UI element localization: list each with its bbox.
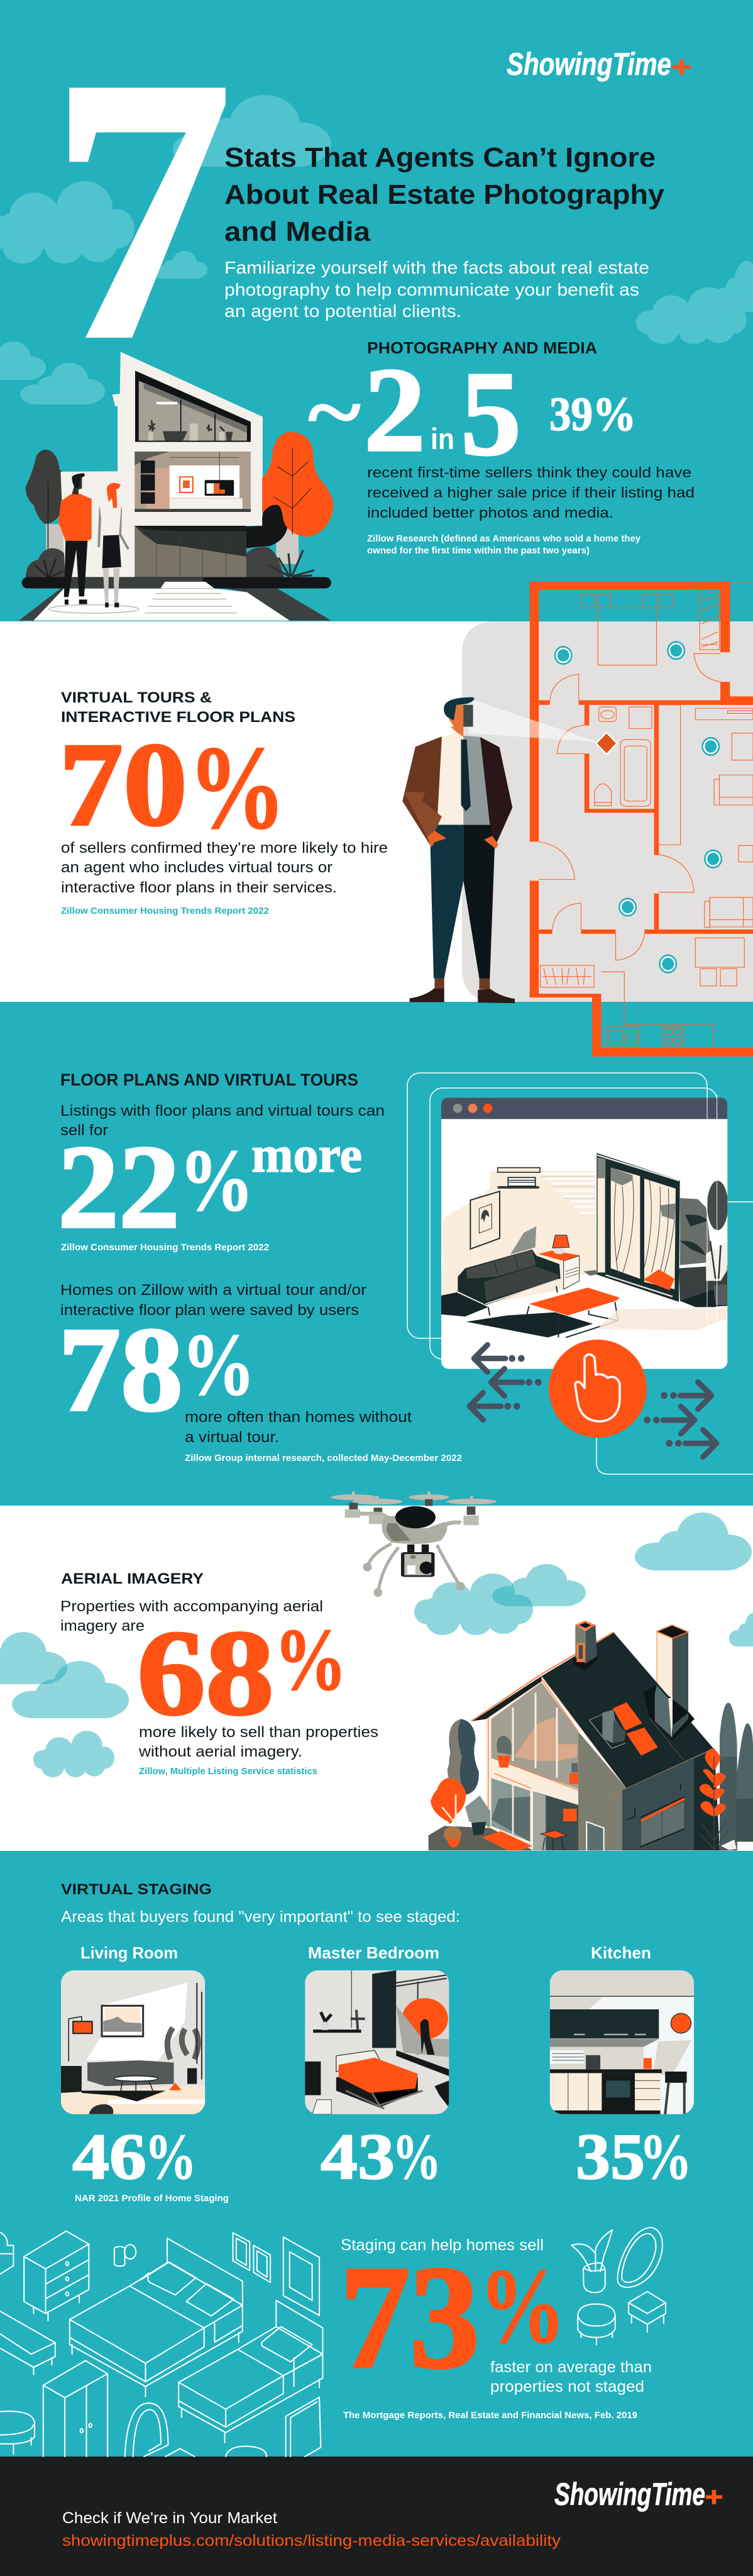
body text: more often than homes without — [185, 1409, 412, 1426]
body text: properties not staged — [490, 2378, 644, 2396]
title — [224, 142, 665, 247]
small vase — [114, 2245, 136, 2266]
heading: VIRTUAL STAGING — [61, 1881, 212, 1898]
orange leaf plant — [700, 1748, 737, 1850]
person: man — [58, 473, 92, 604]
title bar — [441, 1094, 727, 1119]
body text: included better photos and media. — [367, 504, 613, 521]
tree: dark — [26, 450, 74, 577]
stat: 35%: % — [639, 2121, 692, 2193]
panel: virtual staging — [61, 1881, 694, 2204]
camera — [401, 1545, 434, 1577]
heading: VIRTUAL TOURS & — [61, 689, 212, 706]
stat: about 2 in 5: in — [431, 422, 454, 455]
illustration: modern house with couple — [19, 352, 333, 621]
section background: virtual staging — [0, 1851, 753, 2457]
source: Zillow Research (defined as Americans who sold a home they — [367, 534, 640, 544]
stat: 22% more: 22 — [58, 1121, 180, 1253]
framed pictures — [233, 2233, 319, 2316]
stat: 73% — [340, 2235, 566, 2399]
call to action: Check if We're in Your Market — [62, 2509, 277, 2527]
panel: aerial imagery stat — [60, 1570, 378, 1777]
walls — [530, 582, 753, 1057]
stat: 43%: % — [392, 2121, 441, 2193]
stat: about 2 in 5: 5 — [461, 347, 521, 480]
stat: 22% more: % — [179, 1131, 254, 1230]
panel: footer — [62, 2477, 723, 2550]
panel: virtual tours stat — [59, 689, 388, 916]
text: listings: Listings with floor plans and virtual tours can — [60, 1102, 385, 1119]
section background: virtual tours — [0, 621, 753, 1002]
front wall with window — [622, 1748, 720, 1850]
label: kitchen: Kitchen — [591, 1943, 651, 1962]
stat: 68% — [137, 1605, 347, 1740]
title: Stats That Agents Can’t Ignore — [224, 142, 656, 173]
body text: faster on average than — [490, 2358, 652, 2376]
source — [367, 534, 640, 556]
stat: 70% — [59, 719, 286, 854]
stat: 68%: % — [274, 1611, 347, 1709]
footstool round — [578, 2304, 615, 2345]
heading: PHOTOGRAPHY AND MEDIA — [367, 338, 597, 357]
panel: staging speed stat — [340, 2235, 652, 2421]
subtitle — [224, 258, 649, 321]
arrows: swipe right — [644, 1382, 717, 1457]
body text: interactive floor plans in their services. — [61, 879, 337, 896]
plant — [571, 2230, 612, 2292]
person: woman — [99, 483, 128, 608]
body text: recent first-time sellers think they could have — [367, 464, 691, 480]
oval mirror — [618, 2228, 662, 2287]
text: listings: sell for — [60, 1122, 108, 1139]
subtitle: Familiarize yourself with the facts about real estate — [224, 258, 649, 277]
heading: FLOOR PLANS AND VIRTUAL TOURS — [60, 1070, 358, 1089]
url: showingtimeplus.com/solutions/listing-media-services/availability — [62, 2532, 561, 2550]
stat: 43% — [321, 2121, 441, 2193]
text: Staging can help homes sell — [341, 2236, 544, 2254]
roof — [471, 1632, 715, 1800]
section background: header and photography — [0, 0, 753, 621]
title: and Media — [224, 216, 371, 247]
trees and yard — [429, 1719, 567, 1850]
stat: 78%: % — [182, 1316, 255, 1414]
image: kitchen — [550, 1970, 694, 2114]
stat: 22% more: more — [251, 1126, 362, 1183]
clouds: aerial section — [0, 1513, 753, 1777]
source: NAR 2021 Profile of Home Staging — [75, 2193, 229, 2204]
clouds: header sky — [0, 95, 753, 404]
source: Zillow Consumer Housing Trends Report 2022 — [61, 906, 269, 916]
room scene — [441, 1153, 728, 1338]
lamp table at left — [0, 2232, 13, 2274]
body text — [138, 1724, 378, 1760]
footstool square — [629, 2292, 666, 2332]
source: Zillow Group internal research, collected May-December 2022 — [185, 1453, 462, 1463]
stat: 46% — [72, 2121, 197, 2193]
arrows: swipe left — [470, 1345, 542, 1420]
stat: 68%: 68 — [137, 1605, 274, 1740]
body text: an agent who includes virtual tours or — [61, 859, 333, 876]
house body — [60, 352, 263, 577]
ground and path — [19, 577, 331, 621]
illustration: drone with camera — [331, 1491, 497, 1597]
bench — [0, 2311, 55, 2375]
heading — [61, 689, 295, 726]
stat: about 2 in 5: ~ — [308, 364, 361, 461]
section background: floor plans and virtual tours — [0, 1002, 753, 1506]
text: Properties with accompanying aerial — [60, 1598, 323, 1615]
background trees — [720, 1702, 753, 1850]
subtitle: photography to help communicate your benefit as — [224, 280, 639, 299]
heading: INTERACTIVE FLOOR PLANS — [61, 709, 295, 726]
stat: 73%: 73 — [340, 2235, 480, 2399]
text — [60, 1598, 323, 1635]
stat: 78%: 78 — [58, 1302, 183, 1436]
hotspot markers — [554, 641, 722, 974]
illustration: isometric house — [429, 1621, 753, 1850]
bed two — [179, 2301, 322, 2443]
panel: photography and media stat — [308, 338, 695, 556]
illustration: browser window with living room — [441, 1094, 728, 1369]
body text — [490, 2358, 652, 2396]
doors and furniture outlines — [539, 583, 753, 1048]
arms and body — [345, 1506, 479, 1597]
room fill in top of plan — [539, 589, 720, 621]
image: master bedroom — [305, 1970, 449, 2114]
source: Zillow Consumer Housing Trends Report 2022 — [61, 1242, 269, 1253]
body text: without aerial imagery. — [138, 1743, 302, 1760]
tall chimney — [657, 1625, 688, 1725]
subtitle: an agent to potential clients. — [224, 301, 461, 321]
text: homes on Zillow: Homes on Zillow with a virtual tour and/or — [60, 1282, 366, 1299]
facade walls — [486, 1676, 627, 1850]
rotors — [331, 1491, 497, 1504]
stat: 70%: 70 — [59, 719, 187, 851]
dresser — [24, 2231, 89, 2321]
small chimney — [573, 1621, 598, 1671]
heading: AERIAL IMAGERY — [61, 1570, 204, 1587]
section background: footer — [0, 2457, 753, 2576]
illustration: outlined furniture — [0, 2228, 666, 2457]
text: homes on Zillow — [60, 1282, 366, 1319]
stat: 39%: 39% — [549, 388, 636, 441]
body text: of sellers confirmed they’re more likely to hire — [61, 840, 388, 857]
big numeral 7: 7 — [50, 1, 233, 418]
man with view beam — [402, 697, 617, 1003]
stat: 46%: 46 — [72, 2121, 146, 2193]
subheading: Areas that buyers found "very important" to see staged: — [61, 1908, 460, 1926]
label: living room: Living Room — [80, 1943, 178, 1962]
stat: 43%: 43 — [321, 2121, 395, 2193]
panel: floor plans and virtual tours stats — [58, 1070, 462, 1463]
logo: ShowingTime+: ShowingTime — [507, 47, 671, 82]
icon: pointer hand button — [549, 1340, 647, 1438]
items at bottom — [166, 2397, 321, 2457]
illustration: browser window frames — [407, 1073, 753, 1474]
section background: aerial imagery — [0, 1506, 753, 1851]
arched mirror — [125, 2403, 168, 2457]
round ottoman — [0, 2411, 35, 2454]
wardrobe — [43, 2361, 107, 2457]
pots in window — [497, 1736, 578, 1784]
source: The Mortgage Reports, Real Estate and Financial News, Feb. 2019 — [343, 2410, 637, 2421]
stat: about 2 in 5 — [308, 343, 521, 480]
stat: 73%: % — [479, 2246, 566, 2365]
stat: 70%: % — [188, 722, 286, 854]
source: Zillow, Multiple Listing Service statistics — [139, 1766, 317, 1777]
text: listings — [60, 1102, 385, 1139]
body text: more likely to sell than properties — [139, 1724, 378, 1741]
image: living room — [61, 1970, 205, 2114]
body text: received a higher sale price if their listing had — [367, 484, 695, 501]
body text — [61, 840, 388, 896]
stat: about 2 in 5: 2 — [364, 343, 426, 477]
shrubs and orange tree — [35, 432, 333, 577]
title: About Real Estate Photography — [224, 179, 665, 210]
illustration: floor plan background — [462, 621, 753, 1002]
footer logo: + — [704, 2482, 723, 2512]
body text — [185, 1409, 412, 1446]
label: master bedroom: Master Bedroom — [308, 1943, 439, 1962]
source: owned for the first time within the past two years) — [367, 546, 590, 556]
logo: ShowingTime+: + — [670, 50, 691, 83]
illustration: floor plan — [402, 582, 753, 1057]
text: imagery are — [60, 1618, 145, 1635]
text: homes on Zillow: interactive floor plan were saved by users — [60, 1302, 359, 1319]
stat: 46%: % — [145, 2121, 197, 2193]
bed one — [70, 2238, 243, 2397]
footer logo: ShowingTime — [554, 2477, 705, 2512]
body text — [367, 464, 695, 521]
body text: a virtual tour. — [185, 1429, 279, 1446]
stat: 78% — [58, 1302, 255, 1436]
thumbnails — [61, 1970, 694, 2114]
stat: 22% more — [58, 1121, 362, 1253]
stat: 35%: 35 — [576, 2121, 645, 2193]
stat: 35% — [576, 2121, 692, 2193]
